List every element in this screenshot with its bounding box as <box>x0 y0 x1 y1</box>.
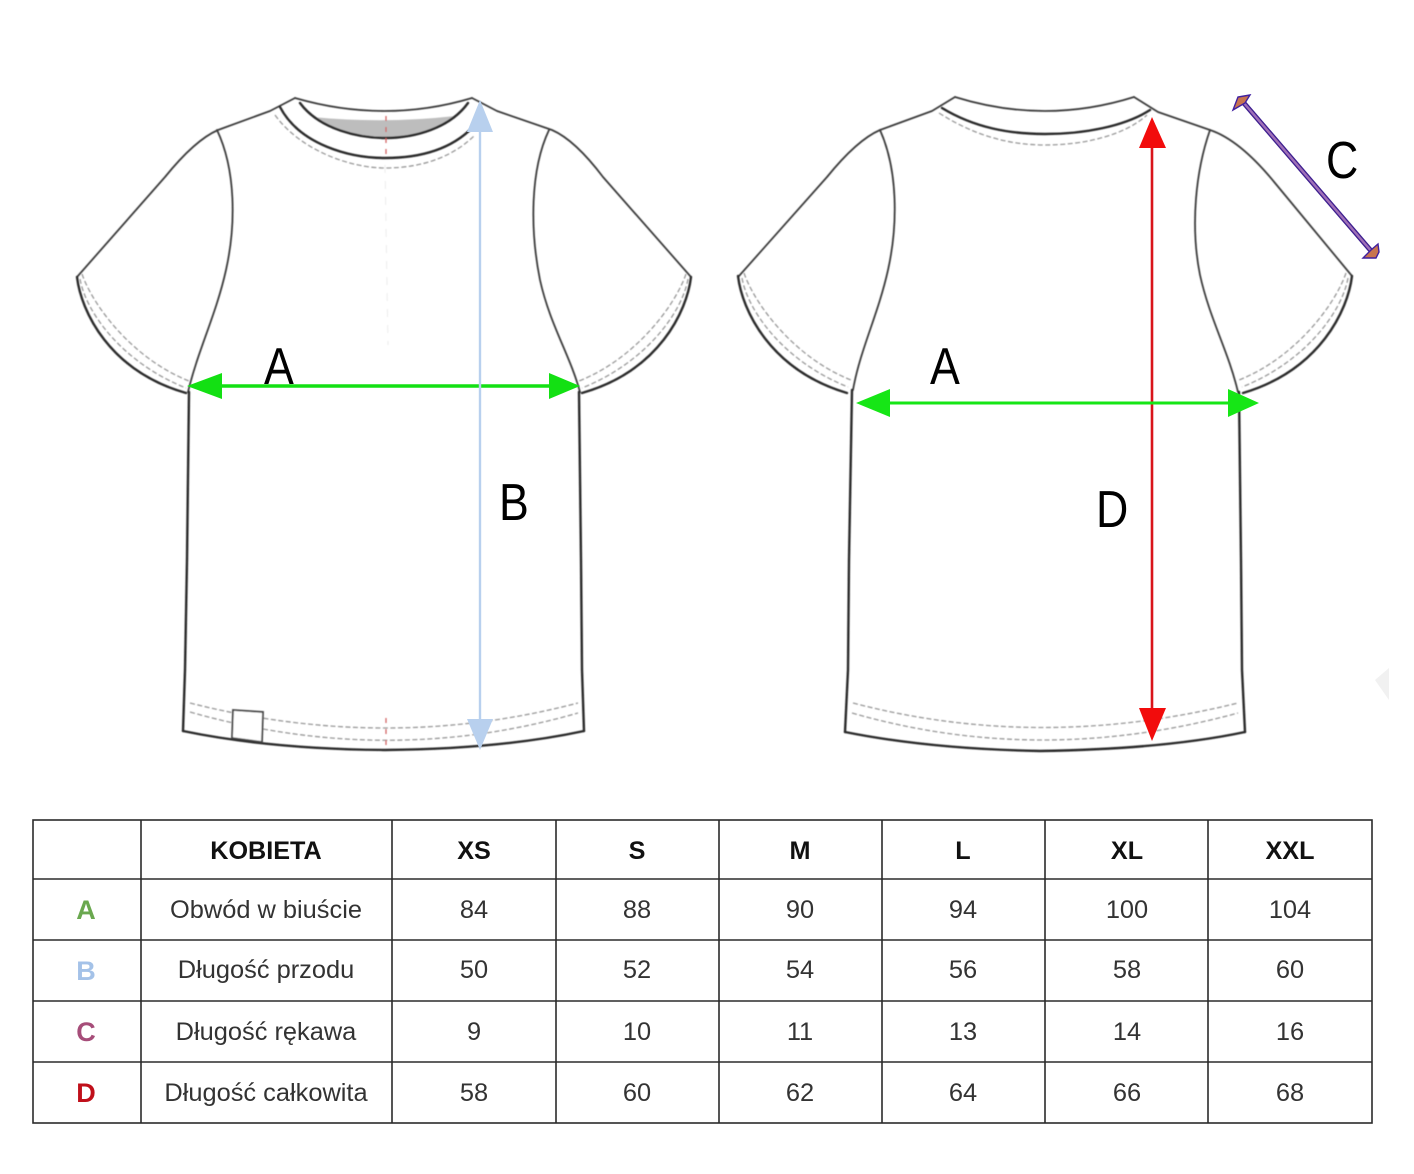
label B: B <box>499 474 529 532</box>
row A: 94 <box>949 896 977 924</box>
row C: 14 <box>1113 1018 1141 1046</box>
row C: 10 <box>623 1018 651 1046</box>
row D: 62 <box>786 1079 814 1107</box>
row A <box>76 895 1311 925</box>
back sleeve and hem stitching <box>742 273 1348 740</box>
row B: 56 <box>949 956 977 984</box>
row D: 64 <box>949 1079 977 1107</box>
table header row: XXL <box>1266 837 1314 865</box>
row C <box>76 1017 1304 1047</box>
front t-shirt drawing <box>77 98 691 750</box>
label A front: A <box>264 338 294 396</box>
row B: 58 <box>1113 956 1141 984</box>
row B: 54 <box>786 956 814 984</box>
row A: 90 <box>786 896 814 924</box>
front shirt outline <box>77 98 691 750</box>
row A: 100 <box>1106 896 1148 924</box>
row D: 66 <box>1113 1079 1141 1107</box>
artifact mark <box>1375 668 1389 700</box>
table header row <box>210 837 1314 865</box>
label A back: A <box>930 338 960 396</box>
row D: Długość całkowita <box>164 1079 368 1107</box>
row D: D <box>76 1078 96 1108</box>
row D: 68 <box>1276 1079 1304 1107</box>
table header row: KOBIETA <box>210 837 322 865</box>
row D: 60 <box>623 1079 651 1107</box>
row C: 16 <box>1276 1018 1304 1046</box>
table header row: XS <box>457 837 491 865</box>
row B: Długość przodu <box>178 956 354 984</box>
arrow A front <box>187 373 580 399</box>
label D: D <box>1096 481 1128 539</box>
row B: 60 <box>1276 956 1304 984</box>
hem label patch <box>232 710 263 742</box>
row B <box>76 956 1304 986</box>
label C: C <box>1326 132 1358 190</box>
front collar <box>275 98 475 168</box>
row B: 50 <box>460 956 488 984</box>
row D: 58 <box>460 1079 488 1107</box>
size table <box>33 820 1372 1123</box>
row C: 13 <box>949 1018 977 1046</box>
table header row: M <box>790 837 810 865</box>
arrow C <box>1233 95 1379 258</box>
table header row: L <box>955 837 971 865</box>
arrow B <box>467 100 493 750</box>
row A: 104 <box>1269 896 1311 924</box>
back collar <box>939 108 1150 145</box>
back shirt outline <box>738 97 1352 751</box>
row A: A <box>76 895 96 925</box>
row C: 9 <box>467 1018 481 1046</box>
row B: 52 <box>623 956 651 984</box>
row C: Długość rękawa <box>176 1018 357 1046</box>
row A: 88 <box>623 896 651 924</box>
row B: B <box>76 956 96 986</box>
front sleeve and hem stitching <box>80 274 688 740</box>
table header row: XL <box>1111 837 1143 865</box>
arrow A back <box>856 389 1259 417</box>
row A: Obwód w biuście <box>170 896 362 924</box>
back t-shirt drawing <box>738 97 1352 751</box>
table header row: S <box>629 837 645 865</box>
row C: 11 <box>787 1018 813 1046</box>
centre seam <box>385 116 388 748</box>
table grid <box>33 820 1372 1123</box>
arrow D <box>1139 117 1166 741</box>
row A: 84 <box>460 896 488 924</box>
row D <box>76 1078 1304 1108</box>
row C: C <box>76 1017 96 1047</box>
